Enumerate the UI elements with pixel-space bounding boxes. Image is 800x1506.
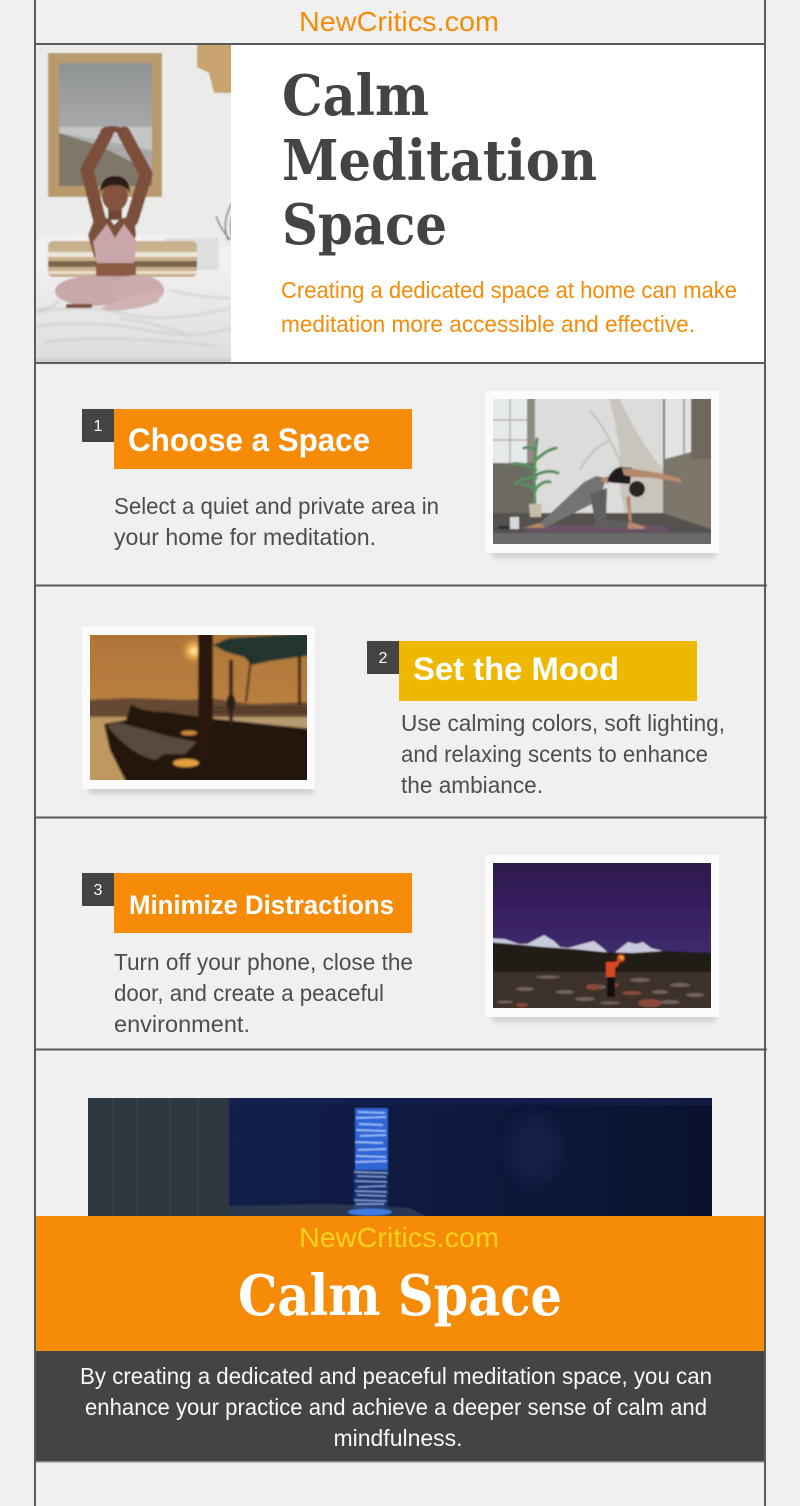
- hero title: Space: [282, 192, 447, 258]
- step 2 heading: [399, 641, 697, 701]
- header site name: NewCritics.com: [299, 6, 499, 37]
- step 2 text: and relaxing scents to enhance: [401, 741, 708, 767]
- closing banner: [36, 1216, 764, 1351]
- hero subtitle: [281, 277, 737, 337]
- step 2 text: [401, 710, 725, 798]
- step 3 text: door, and create a peaceful: [114, 980, 384, 1006]
- step 1 heading: Choose a Space: [128, 422, 370, 458]
- conclusion panel: By creating a dedicated and peaceful meditation space, you can: [80, 1363, 712, 1389]
- hero subtitle: Creating a dedicated space at home can make: [281, 277, 737, 303]
- step 1 text: Select a quiet and private area in: [114, 493, 439, 519]
- step 2 number badge: [367, 641, 399, 674]
- step 3 text: [114, 949, 413, 1037]
- hero panel: [30, 40, 764, 370]
- step 3 number badge: [82, 873, 114, 906]
- step 2 number badge: 2: [379, 650, 388, 667]
- step 1 number badge: 1: [94, 418, 103, 435]
- step 3 number badge: 3: [94, 882, 103, 899]
- hero title: [282, 63, 597, 258]
- conclusion panel: [36, 1351, 764, 1461]
- step 3 text: Turn off your phone, close the: [114, 949, 413, 975]
- hero title: Calm: [282, 63, 429, 129]
- conclusion panel: enhance your practice and achieve a deeper sense of calm and: [85, 1394, 707, 1420]
- step 1 heading: [114, 409, 412, 469]
- step 1 number badge: [82, 409, 114, 442]
- step 1 text: your home for meditation.: [114, 524, 376, 550]
- closing title: Calm Space: [238, 1263, 562, 1329]
- step 3 panel: [82, 855, 719, 1037]
- step 2 text: the ambiance.: [401, 772, 543, 798]
- step 2 panel: [82, 627, 725, 798]
- step 3 text: environment.: [114, 1011, 250, 1037]
- step 1 photo: yoga pose: [485, 391, 719, 557]
- step 2 text: Use calming colors, soft lighting,: [401, 710, 725, 736]
- closing photo: moonlight on water: [88, 1098, 712, 1216]
- step 3 photo: figure with lantern at night: [485, 855, 719, 1021]
- closing banner: NewCritics.com: [299, 1222, 499, 1253]
- hero subtitle: meditation more accessible and effective.: [281, 311, 695, 337]
- hero title: Meditation: [282, 128, 597, 194]
- hero photo: woman meditating on bed: [36, 45, 231, 362]
- conclusion panel: mindfulness.: [334, 1425, 462, 1451]
- step 1 text: [114, 493, 439, 550]
- step 2 photo: sunset boat: [82, 627, 315, 793]
- step 3 heading: [114, 873, 412, 933]
- step 2 heading: Set the Mood: [413, 651, 619, 687]
- step 1 panel: [82, 391, 719, 557]
- step 3 heading: Minimize Distractions: [129, 890, 394, 920]
